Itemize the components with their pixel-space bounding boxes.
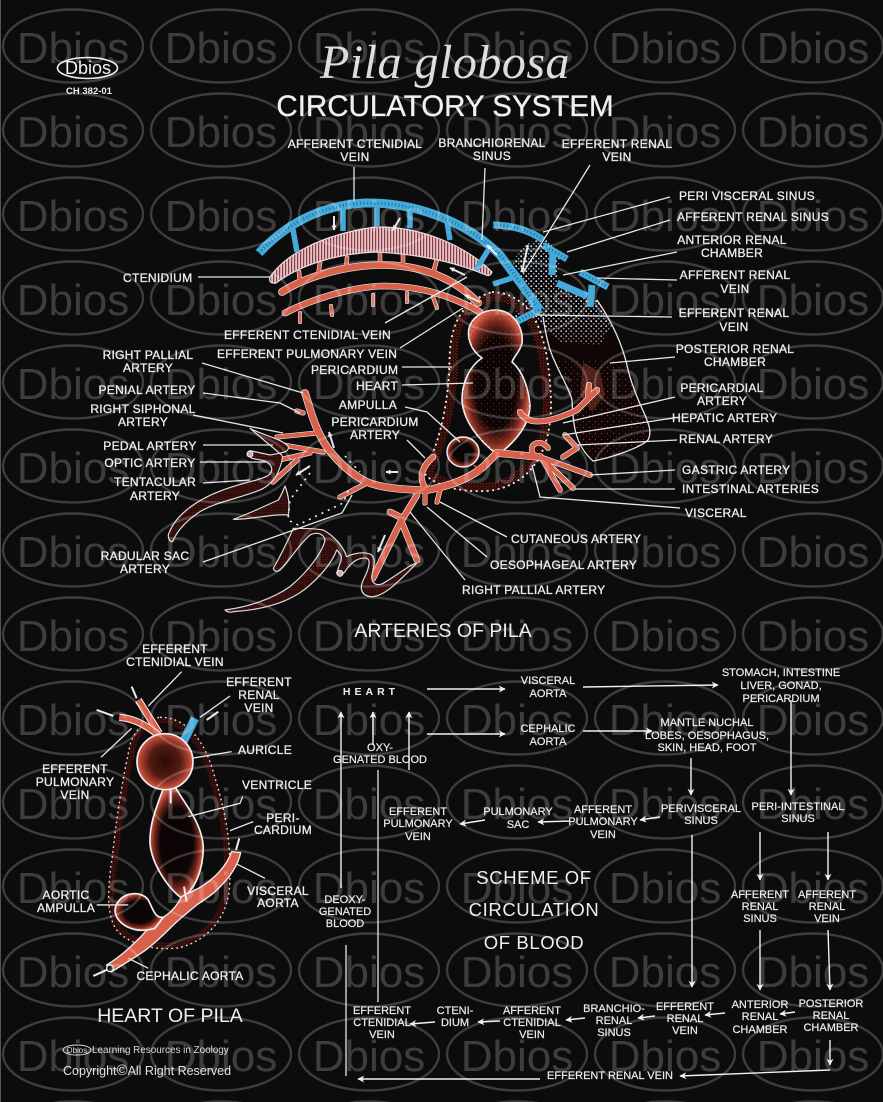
node: branchiorenal sinus: BRANCHIO- [583, 1003, 645, 1015]
label: gastric artery: GASTRIC ARTERY [682, 463, 790, 477]
node: efferent renal vein: VEIN [672, 1025, 698, 1037]
afferent ctenidial vein [259, 203, 540, 310]
label: pericardium: PERICARDIUM [311, 363, 398, 377]
title: Pila globosa [319, 36, 570, 89]
radular sac [288, 456, 360, 525]
label: efferent renal vein: VEIN [244, 701, 274, 715]
node: visceral aorta: AORTA [530, 688, 567, 700]
label: ventricle: VENTRICLE [242, 778, 312, 792]
small logo: Dbios [67, 1046, 87, 1055]
label: pericardial artery: PERICARDIAL [680, 381, 764, 395]
label: oesophageal artery: OESOPHAGEAL ARTERY [490, 558, 637, 572]
ctenidium [270, 227, 492, 283]
label: efferent ctenidial vein: CTENIDIAL VEIN [126, 655, 224, 669]
label: branchiorenal sinus: SINUS [473, 149, 511, 163]
node: afferent ctenidial vein: CTENIDIAL [503, 1017, 561, 1029]
auricle [137, 734, 193, 790]
node: deoxygenated blood: BLOOD [326, 918, 364, 930]
aorta end ring [107, 965, 113, 972]
label: efferent renal vein: VEIN [602, 150, 632, 164]
node: afferent renal vein: VEIN [814, 913, 840, 925]
label: aortic ampulla: AMPULLA [37, 901, 95, 915]
node: efferent ctenidial vein: VEIN [369, 1029, 395, 1041]
node: mantle nuchal lobes: MANTLE NUCHAL [661, 717, 753, 729]
efferent ctenidial and pulmonary veins [282, 253, 480, 322]
node: afferent renal sinus: AFFERENT [731, 889, 789, 901]
label: pericardium artery: ARTERY [350, 428, 400, 442]
label: efferent renal vein: VEIN [719, 320, 749, 334]
label: afferent renal vein: VEIN [720, 282, 750, 296]
label: branchiorenal sinus: BRANCHIORENAL [438, 136, 546, 150]
label: efferent renal vein: EFFERENT RENAL [679, 306, 789, 320]
node: perivisceral sinus: PERIVISCERAL [661, 803, 741, 815]
heading: scheme of circulation of blood: OF BLOOD [484, 932, 584, 953]
node: ctenidium: CTENI- [437, 1005, 473, 1017]
node: posterior renal chamber: POSTERIOR [799, 998, 863, 1010]
label: afferent ctenidial vein: AFFERENT CTENIDIAL [288, 137, 422, 151]
node: cephalic aorta: CEPHALIC [520, 723, 576, 735]
label: penial artery: PENIAL ARTERY [98, 383, 196, 397]
aortic ampulla [115, 894, 163, 930]
label: radular sac artery: RADULAR SAC [101, 549, 189, 563]
label: afferent ctenidial vein: VEIN [340, 150, 370, 164]
node: heart: HEART [343, 686, 399, 698]
node: pulmonary sac: SAC [507, 819, 529, 831]
flow arrows [296, 216, 528, 552]
label: intestinal arteries: INTESTINAL ARTERIES [682, 482, 819, 496]
label: tentacular artery: TENTACULAR [114, 475, 196, 489]
label: right pallial artery: RIGHT PALLIAL ARTERY [462, 583, 605, 597]
node: efferent pulmonary vein: VEIN [405, 831, 431, 843]
node: branchiorenal sinus: SINUS [597, 1027, 631, 1039]
foot [225, 528, 417, 612]
label: efferent renal vein: EFFERENT [226, 675, 292, 689]
label: right siphonal artery: RIGHT SIPHONAL [90, 402, 196, 416]
aorta [107, 852, 241, 972]
pericardium [109, 717, 230, 949]
label: anterior renal chamber: CHAMBER [701, 246, 763, 260]
node: perivisceral sinus: SINUS [684, 815, 718, 827]
node: peri-intestinal sinus: PERI-INTESTINAL [752, 801, 844, 813]
aorta and arteries [270, 385, 597, 578]
label: visceral aorta: VISCERAL [247, 884, 309, 898]
subtitle: CIRCULATORY SYSTEM [276, 90, 614, 123]
label: ctenidium: CTENIDIUM [123, 271, 192, 285]
label: optic artery: OPTIC ARTERY [104, 456, 196, 470]
node: afferent renal sinus: SINUS [743, 913, 777, 925]
node: posterior renal chamber: RENAL [813, 1010, 849, 1022]
node: efferent renal vein: EFFERENT [656, 1001, 714, 1013]
label: peri visceral sinus: PERI VISCERAL SINUS [679, 189, 815, 203]
label: efferent pulmonary vein: EFFERENT PULMONARY VEIN [217, 347, 397, 361]
flow arrows [93, 687, 239, 976]
node: efferent ctenidial vein: CTENIDIAL [353, 1017, 411, 1029]
node: oxygenated blood: OXY- [367, 742, 393, 754]
label: right pallial artery: ARTERY [123, 361, 173, 375]
node: deoxygenated blood: GENATED [319, 906, 371, 918]
node: afferent ctenidial vein: AFFERENT [503, 1005, 561, 1017]
node: stomach, intestine, liver, gonad, pericardium: LIVER, GONAD, [740, 680, 822, 692]
label: efferent ctenidial vein: EFFERENT CTENIDIAL VEIN [224, 328, 391, 342]
label: renal artery: RENAL ARTERY [679, 432, 773, 446]
node: afferent renal vein: AFFERENT [798, 889, 856, 901]
head and foot outline [168, 428, 417, 612]
node: ctenidium: DIUM [441, 1017, 469, 1029]
node: anterior renal chamber: CHAMBER [732, 1024, 788, 1036]
renal veins and sinus [493, 225, 608, 325]
label: pericardium: PERI- [266, 811, 300, 825]
caption: arteries of Pila: ARTERIES OF PILA [354, 620, 532, 642]
catalogue code: CH 382-01 [66, 86, 113, 97]
node: afferent renal sinus: RENAL [742, 901, 778, 913]
node: deoxygenated blood: DEOXY- [324, 894, 366, 906]
heading: scheme of circulation of blood: SCHEME OF [476, 867, 592, 888]
label: posterior renal chamber: CHAMBER [704, 355, 766, 369]
node: efferent renal vein: RENAL [667, 1013, 703, 1025]
label: cutaneous artery: CUTANEOUS ARTERY [511, 532, 641, 546]
label: anterior renal chamber: ANTERIOR RENAL [677, 233, 787, 247]
node: oxygenated blood: GENATED BLOOD [333, 754, 427, 766]
label: aortic ampulla: AORTIC [43, 888, 89, 902]
label: tentacular artery: ARTERY [130, 489, 180, 503]
node: efferent pulmonary vein: PULMONARY [383, 818, 453, 830]
label: visceral aorta: AORTA [257, 896, 299, 910]
heading: scheme of circulation of blood: CIRCULATION [469, 899, 599, 920]
node: efferent pulmonary vein: EFFERENT [389, 806, 447, 818]
label: cephalic aorta: CEPHALIC AORTA [136, 969, 244, 983]
node: afferent pulmonary vein: AFFERENT [574, 804, 632, 816]
label: afferent renal sinus: AFFERENT RENAL SINUS [677, 210, 829, 224]
kidney region [510, 235, 651, 461]
label: ampulla: AMPULLA [339, 398, 397, 412]
node: pulmonary sac: PULMONARY [483, 806, 553, 818]
leader lines [97, 672, 265, 968]
head and tentacle [168, 428, 288, 542]
label: efferent renal vein: RENAL [238, 688, 280, 702]
node: efferent renal vein (bottom): EFFERENT RENAL VEIN [547, 1070, 673, 1082]
label: visceral: VISCERAL [685, 506, 747, 520]
node: anterior renal chamber: RENAL [742, 1011, 778, 1023]
foot ring [337, 570, 343, 576]
diagram: heart of Pila [93, 672, 265, 976]
label: efferent pulmonary vein: VEIN [60, 788, 90, 802]
label: efferent pulmonary vein: PULMONARY [36, 775, 114, 789]
node: posterior renal chamber: CHAMBER [803, 1022, 859, 1034]
node: mantle nuchal lobes: LOBES, OESOPHAGUS, [645, 730, 769, 742]
leader lines [193, 165, 680, 580]
node: peri-intestinal sinus: SINUS [781, 813, 815, 825]
ventricle [150, 787, 203, 898]
node: anterior renal chamber: ANTERIOR [732, 999, 788, 1011]
caption: heart of Pila: HEART OF PILA [97, 1005, 243, 1027]
node: efferent ctenidial vein: EFFERENT [353, 1005, 411, 1017]
label: auricle: AURICLE [238, 743, 292, 757]
label: radular sac artery: ARTERY [120, 562, 170, 576]
node: branchiorenal sinus: RENAL [596, 1015, 632, 1027]
heart: auricle and ventricle [462, 310, 530, 455]
label: pericardial artery: ARTERY [697, 394, 747, 408]
label: heart: HEART [356, 379, 398, 393]
label: hepatic artery: HEPATIC ARTERY [672, 411, 777, 425]
arrows [341, 685, 830, 1079]
node: mantle nuchal lobes: SKIN, HEAD, FOOT [657, 742, 757, 754]
label: right pallial artery: RIGHT PALLIAL [103, 348, 193, 362]
label: pedal artery: PEDAL ARTERY [103, 439, 197, 453]
label: posterior renal chamber: POSTERIOR RENAL [676, 342, 794, 356]
tentacle lobe [233, 486, 289, 519]
vessels [119, 700, 195, 745]
copyright: Copyright©All Right Reserved [63, 1062, 231, 1079]
pericardium [424, 292, 551, 491]
label: right siphonal artery: ARTERY [118, 415, 168, 429]
node: afferent pulmonary vein: VEIN [590, 829, 616, 841]
flow chart: scheme of circulation [319, 667, 863, 1082]
logo: Dbios: Dbios [65, 58, 111, 78]
ampulla [447, 437, 490, 475]
label: efferent renal vein: EFFERENT RENAL [562, 137, 672, 151]
small logo [63, 1045, 91, 1055]
optic ring [247, 451, 253, 457]
node: stomach, intestine, liver, gonad, pericardium: PERICARDIUM [742, 693, 820, 705]
node: afferent renal vein: RENAL [809, 901, 845, 913]
label: pericardium artery: PERICARDIUM [331, 415, 419, 429]
node: cephalic aorta: AORTA [530, 736, 567, 748]
node: stomach, intestine, liver, gonad, pericardium: STOMACH, INTESTINE [722, 667, 840, 679]
label: efferent pulmonary vein: EFFERENT [42, 762, 108, 776]
label: pericardium: CARDIUM [254, 823, 312, 837]
credit line: Learning Resources in Zoology [92, 1045, 229, 1056]
node: visceral aorta: VISCERAL [521, 675, 575, 687]
node: afferent ctenidial vein: VEIN [519, 1029, 545, 1041]
label: efferent ctenidial vein: EFFERENT [142, 642, 208, 656]
diagram: arteries of Pila [168, 203, 651, 612]
node: afferent pulmonary vein: PULMONARY [568, 816, 638, 828]
label: afferent renal vein: AFFERENT RENAL [680, 268, 790, 282]
